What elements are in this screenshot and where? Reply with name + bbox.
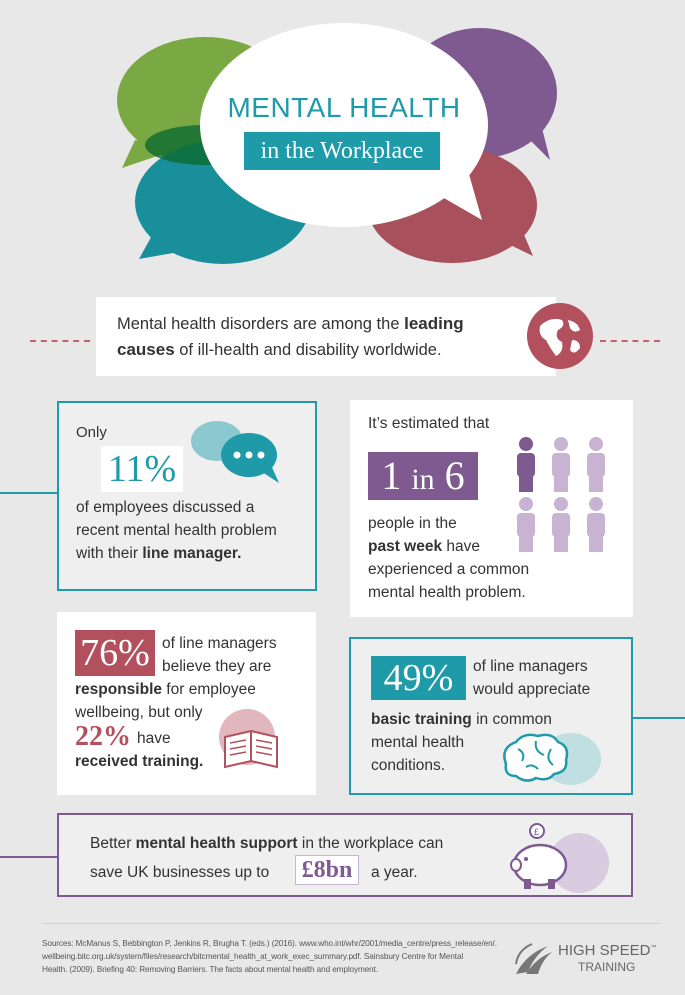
sources text: wellbeing.bitc.org.uk/system/files/research/bitcmental_health_at_work_exec_summary.pdf. Sainsbury Centre for Mental (42, 952, 463, 961)
panel: £8bn: a year. (371, 864, 418, 881)
bubble: green (117, 37, 293, 168)
label: only: Only (76, 424, 107, 441)
icon: chat bubbles (191, 421, 279, 483)
panel: 49%: mental health (371, 734, 464, 751)
panel: 49%: conditions. (371, 757, 445, 774)
text (76, 499, 277, 562)
title: MENTAL HEALTH (227, 92, 461, 123)
panel: 49% (349, 637, 633, 795)
stat: 76%: 76% (80, 632, 150, 674)
intro box: Mental health disorders are among the leading (117, 314, 464, 333)
panel: 76%: wellbeing, but only (75, 704, 203, 721)
panel: 76% (57, 612, 316, 795)
panel: £8bn: save UK businesses up to (90, 864, 269, 881)
text: with their line manager. (76, 545, 241, 562)
panel: 49%: basic training in common (371, 711, 552, 728)
panel: 49%: of line managers (473, 658, 588, 675)
sources text: Sources: McManus S, Bebbington P, Jenkins R, Brugha T. (eds.) (2016). www.who.int/whr/2001/media_centre/press_release/en/. (42, 939, 497, 948)
stat: 11%: 11% (108, 448, 176, 490)
dashed lines (30, 340, 90, 342)
bubble: white title (200, 23, 488, 227)
panel: 49%: would appreciate (473, 681, 590, 698)
panel: £8bn: Better mental health support in the workplace can (90, 835, 443, 852)
panel: 76%: have (137, 730, 171, 747)
panel: 76%: believe they are (162, 658, 271, 675)
stat: 49%: 49% (384, 657, 453, 699)
bubble: teal (135, 140, 311, 264)
icon: piggy bank: £ (534, 827, 539, 837)
icon: book (219, 709, 278, 768)
logo (515, 942, 657, 974)
stat: £8bn: £8bn (302, 857, 352, 883)
bubble: red (367, 147, 537, 263)
bubble: purple (403, 28, 557, 160)
header: speech bubbles (117, 23, 557, 264)
text: of employees discussed a (76, 499, 254, 516)
panel: 1 in 6 (350, 400, 633, 617)
panel: 76%: of line managers (162, 635, 277, 652)
stat: 49% (371, 656, 466, 700)
icon: people (517, 437, 605, 552)
intro box: causes of ill-health and disability worldwide. (117, 340, 442, 359)
panel: 1 in 6: past week have (368, 538, 480, 555)
panel: 76%: received training. (75, 753, 203, 770)
text: recent mental health problem (76, 522, 277, 539)
panel: 76%: responsible for employee (75, 681, 256, 698)
logo: TRAINING (578, 960, 635, 974)
panel: 1 in 6: experienced a common (368, 561, 529, 578)
icon: piggy bank (510, 823, 609, 893)
panel: 1 in 6: mental health problem. (368, 584, 526, 601)
stat: 1 in 6: 1 in 6 (381, 453, 465, 498)
panel: £8bn (57, 813, 633, 897)
sources text: Health. (2009). Briefing 40: Removing Barriers. The facts about mental health and employment. (42, 965, 378, 974)
panel: 1 in 6: It’s estimated that (368, 415, 489, 432)
subtitle box (244, 132, 440, 170)
panel: 1 in 6: people in the (368, 515, 457, 532)
panel: 11% (57, 401, 317, 591)
stat: 22%: 22% (75, 721, 131, 752)
sources text (42, 939, 497, 974)
subtitle box: in the Workplace (261, 138, 423, 164)
logo: HIGH SPEED™ (558, 942, 657, 959)
icon: brain (503, 733, 601, 785)
stat: £8bn (295, 855, 359, 885)
icon: globe (527, 303, 593, 369)
intro box (96, 297, 556, 376)
